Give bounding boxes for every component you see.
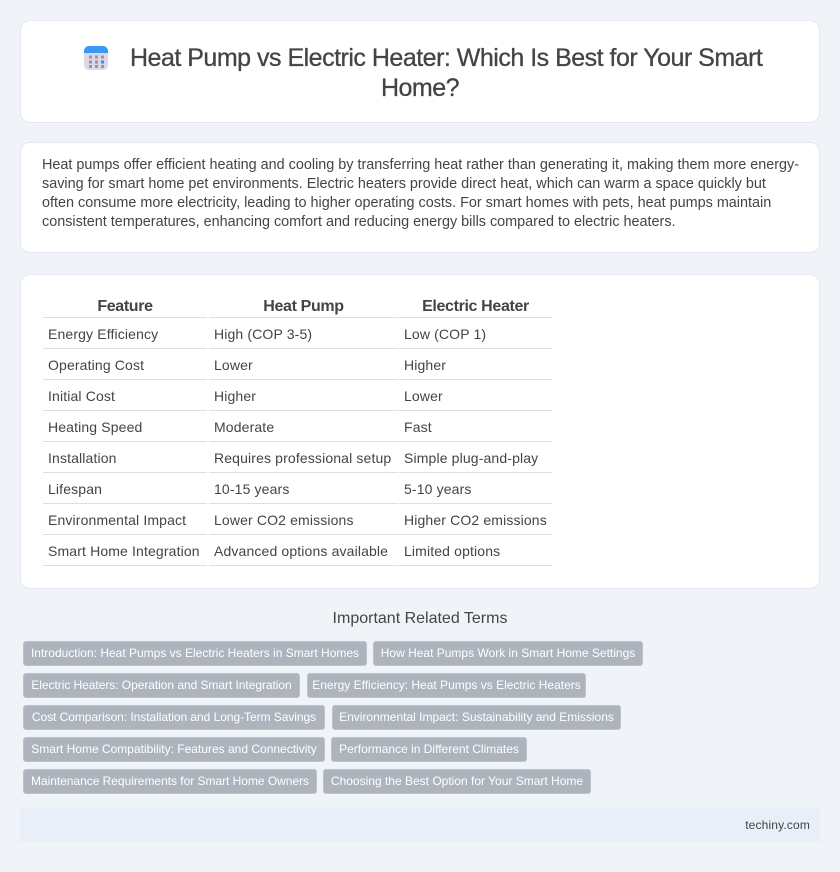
row: smart home integration: Smart Home Integration xyxy=(48,543,200,559)
tag: Energy Efficiency: Heat Pumps vs Electric Heaters xyxy=(312,678,581,692)
row: installation xyxy=(48,450,538,466)
row: lifespan: Lifespan xyxy=(48,481,102,497)
tag: Cost Comparison: Installation and Long-Term Savings xyxy=(32,710,316,724)
row: lifespan: 5-10 years xyxy=(404,481,472,497)
tag: Smart Home Compatibility: Features and Connectivity xyxy=(31,742,317,756)
row: environmental impact: Higher CO2 emissions xyxy=(404,512,547,528)
tag: Maintenance Requirements for Smart Home Owners xyxy=(31,774,309,788)
table header xyxy=(97,298,529,315)
title: Heat Pump vs Electric Heater: Which Is Best for Your Smart xyxy=(130,44,762,72)
tag xyxy=(23,641,367,666)
intro text: saving for smart home pet environments. Electric heaters provide direct heat, which can warm a space quickly but xyxy=(42,176,766,192)
row: initial cost xyxy=(48,388,443,404)
row: heating speed: Fast xyxy=(404,419,432,435)
table header: Heat Pump xyxy=(263,298,344,315)
row: heating speed: Heating Speed xyxy=(48,419,142,435)
tag xyxy=(23,769,317,794)
row: heating speed xyxy=(48,419,432,435)
row: initial cost: Higher xyxy=(214,388,256,404)
row: lifespan: 10-15 years xyxy=(214,481,289,497)
footer bar xyxy=(20,808,820,842)
row: energy efficiency: Low (COP 1) xyxy=(404,326,486,342)
tag xyxy=(307,673,586,698)
row: initial cost: Initial Cost xyxy=(48,388,115,404)
tag: Choosing the Best Option for Your Smart Home xyxy=(331,774,583,788)
intro text xyxy=(42,157,799,230)
tag xyxy=(373,641,643,666)
tag: Electric Heaters: Operation and Smart Integration xyxy=(31,678,292,692)
row: operating cost xyxy=(48,357,446,373)
tag: Performance in Different Climates xyxy=(339,742,519,756)
row: smart home integration xyxy=(48,543,500,559)
tag: How Heat Pumps Work in Smart Home Settings xyxy=(381,646,635,660)
row: installation: Requires professional setup xyxy=(214,450,391,466)
row: installation: Installation xyxy=(48,450,117,466)
row: initial cost: Lower xyxy=(404,388,443,404)
related terms heading: Important Related Terms xyxy=(333,610,507,627)
tag: Introduction: Heat Pumps vs Electric Heaters in Smart Homes xyxy=(31,646,359,660)
row: operating cost: Operating Cost xyxy=(48,357,144,373)
row: energy efficiency xyxy=(48,326,486,342)
related terms tags xyxy=(23,641,643,794)
panel: header xyxy=(20,20,820,123)
table header: Electric Heater xyxy=(422,298,529,315)
panel: comparison table xyxy=(20,274,820,589)
footer source: techiny.com xyxy=(745,818,810,832)
tag xyxy=(323,769,591,794)
tag xyxy=(23,737,325,762)
row: environmental impact xyxy=(48,512,547,528)
title: Home? xyxy=(381,74,459,102)
icon: calendar xyxy=(84,46,108,70)
title xyxy=(130,44,763,102)
tag xyxy=(23,705,325,730)
row: energy efficiency: High (COP 3-5) xyxy=(214,326,312,342)
row: lifespan xyxy=(48,481,472,497)
comparison table xyxy=(43,298,552,566)
tag xyxy=(23,673,300,698)
tag xyxy=(332,705,621,730)
row: smart home integration: Advanced options available xyxy=(214,543,388,559)
row: installation: Simple plug-and-play xyxy=(404,450,538,466)
row: operating cost: Lower xyxy=(214,357,253,373)
row: heating speed: Moderate xyxy=(214,419,274,435)
table header: Feature xyxy=(97,298,153,315)
intro text: consistent temperatures, enhancing comfort and reducing energy bills compared to electric heaters. xyxy=(42,214,676,230)
row: energy efficiency: Energy Efficiency xyxy=(48,326,158,342)
intro text: Heat pumps offer efficient heating and cooling by transferring heat rather than generating it, making them more energy- xyxy=(42,157,799,173)
panel: intro paragraph xyxy=(20,142,820,253)
tag: Environmental Impact: Sustainability and Emissions xyxy=(339,710,614,724)
intro text: often consume more electricity, leading to higher operating costs. For smart homes with pets, heat pumps maintain xyxy=(42,195,771,211)
tag xyxy=(331,737,527,762)
row: operating cost: Higher xyxy=(404,357,446,373)
row: smart home integration: Limited options xyxy=(404,543,500,559)
row: environmental impact: Environmental Impact xyxy=(48,512,186,528)
row: environmental impact: Lower CO2 emissions xyxy=(214,512,354,528)
